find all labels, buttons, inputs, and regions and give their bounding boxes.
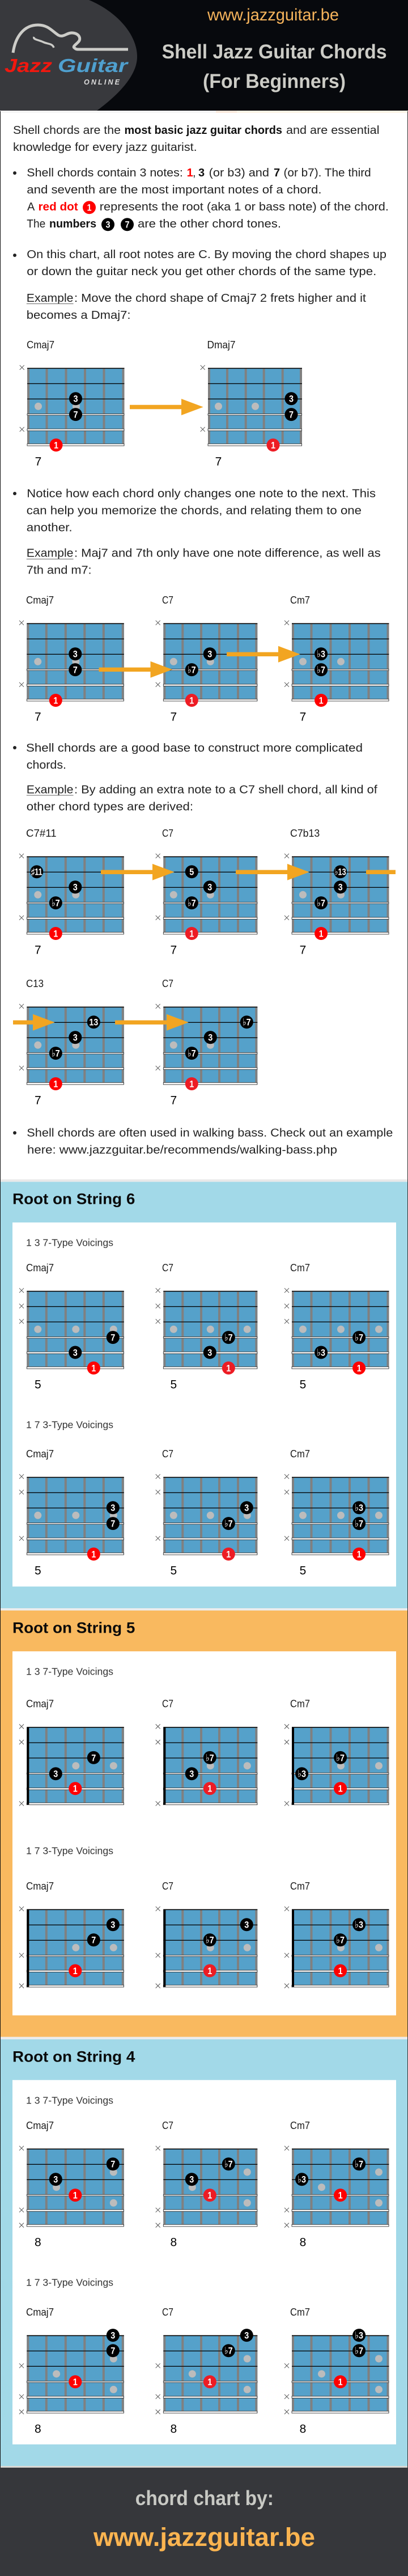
chord diagram: Cmaj7: Cmaj7	[26, 2120, 54, 2131]
panel: root on string 5	[0, 1608, 408, 2037]
bullet: walking bass: here: www.jazzguitar.be/recommends/walking-bass.php	[27, 1144, 337, 1156]
chord diagram: C7b13: 3	[338, 883, 343, 893]
title: (For Beginners)	[203, 70, 346, 92]
panel: root on string 4	[0, 2037, 408, 2466]
chord diagram: Cm7: 7	[300, 710, 306, 723]
bullet: shell chord notes: numbers	[49, 218, 96, 230]
chord diagram: Cmaj7	[20, 339, 125, 468]
chord diagram: Cmaj7: 5	[35, 1378, 41, 1391]
chord diagram: C7b13	[284, 828, 389, 956]
chord diagram: C7	[156, 1881, 257, 1988]
heading: Root on String 5	[12, 1620, 135, 1637]
arrow tail	[366, 870, 396, 874]
intro paragraph: and are essential	[286, 124, 380, 137]
bullet: shell chord notes: ,	[193, 167, 196, 179]
bullet: shell chord notes: A	[27, 201, 35, 213]
chord diagram: C7: 5	[170, 1378, 177, 1391]
intro paragraph: most basic jazz guitar chords	[125, 124, 282, 137]
bullet: shell chord notes: (or b3) and	[209, 167, 269, 179]
chord diagram: Cm7: Cm7	[290, 1881, 310, 1892]
title	[162, 41, 387, 92]
chord diagram: Dmaj7: Dmaj7	[207, 339, 236, 351]
chord diagram: C13: ♭7	[52, 1049, 60, 1059]
chord diagram: Cmaj7: 3	[110, 2331, 116, 2341]
chord diagram: Cmaj7: Cmaj7	[26, 2307, 54, 2318]
chord diagram: C7: 1	[207, 2377, 212, 2388]
bullet: root notes are C: or down the guitar neck you get other chords of the same type.	[27, 265, 376, 278]
chord diagram: C13: 3	[73, 1033, 78, 1043]
intro paragraph: Shell chords are the	[13, 124, 121, 137]
example: moving shape	[27, 292, 366, 322]
chord diagram: C7#11: 1	[53, 929, 58, 939]
subheading: 1 3 7-Type Voicings	[26, 1237, 113, 1249]
chord diagram: Cmaj7: 5	[35, 1564, 41, 1577]
chord diagram: Cmaj7: 3	[73, 394, 78, 404]
chord diagram: Cmaj7	[19, 2307, 124, 2435]
bullet: shell chord notes: represents the root (aka 1 or bass note) of the chord.	[100, 201, 389, 213]
chord diagram: Cmaj7: Cmaj7	[26, 1448, 54, 1460]
chord diagram: C7: 3	[189, 2175, 194, 2185]
chord diagram: C7#11	[19, 828, 124, 956]
subheading: 1 7 3-Type Voicings	[26, 2276, 113, 2288]
chord diagram: C7b13: ♭7	[317, 899, 325, 909]
chord diagram: Dmaj7	[201, 339, 302, 468]
chord diagram: C7#11: 7	[35, 943, 41, 956]
logo wordmark: Guitar	[58, 55, 129, 76]
chord diagram: Cmaj7: 8	[35, 2236, 41, 2249]
chord diagram: Cmaj7: Cmaj7	[27, 339, 54, 351]
bullet: root notes are C: On this chart, all root notes are C. By moving the chord shapes up	[27, 248, 386, 261]
chord diagram: C7: 1	[207, 1966, 212, 1976]
chord diagram: Cm7: ♭3	[355, 1920, 363, 1930]
chord diagram: Cm7: 1	[338, 1784, 343, 1794]
chord diagram: C7: 1	[189, 929, 194, 939]
chord diagram: C7: 8	[170, 2236, 177, 2249]
chord diagram: C13: C13	[26, 978, 44, 989]
chord diagram: Cmaj7: 3	[73, 650, 78, 660]
chord diagram: Cm7: ♭7	[317, 665, 325, 676]
chord diagram: C7: ♭7	[224, 1519, 233, 1529]
bullet: chord changes: can help you memorize the chords, and relating them to one	[27, 505, 362, 517]
chord diagram: Cmaj7: 1	[91, 1363, 96, 1374]
logo wordmark: Jazz	[5, 55, 53, 76]
chord diagram: C7	[156, 978, 257, 1107]
chord diagram: Cmaj7: 7	[91, 1753, 96, 1764]
chord diagram: C7: 3	[207, 883, 212, 893]
subheading: 1 3 7-Type Voicings	[26, 1666, 113, 1677]
intro paragraph: knowledge for every jazz guitarist.	[13, 141, 197, 154]
chord diagram: C7: 1	[189, 1079, 194, 1090]
bullet: walking bass	[13, 1127, 393, 1156]
chord diagram: Cm7: ♭7	[355, 2160, 363, 2170]
chord diagram: Cm7: Cm7	[290, 1698, 310, 1710]
heading: Root on String 4	[12, 2048, 135, 2065]
chord diagram: Cmaj7: 1	[73, 1784, 78, 1794]
chord diagram: C7: ♭7	[224, 1333, 233, 1343]
white card	[12, 2080, 396, 2444]
chord diagram: Cmaj7: Cmaj7	[26, 595, 54, 606]
subheading: 1 7 3-Type Voicings	[26, 1419, 113, 1430]
chord diagram: C7: 1	[226, 1363, 231, 1374]
chord diagram: C7b13: ♭13	[335, 867, 346, 878]
chord diagram: C7: ♭7	[206, 1753, 214, 1764]
chord diagram: C7: 3	[207, 1348, 212, 1358]
arrow	[101, 864, 175, 880]
subheading: 1 7 3-Type Voicings	[26, 1845, 113, 1856]
chord diagram: Cmaj7: 7	[110, 1519, 116, 1529]
chord diagram: Cm7: ♭3	[298, 1769, 306, 1780]
chord diagram: Cmaj7: 8	[35, 2422, 41, 2435]
footer credit: chord chart by:	[135, 2486, 274, 2510]
chord diagram: C7: 1	[189, 695, 194, 706]
chord diagram: C7: C7	[162, 1448, 173, 1460]
bullet: root notes are C	[13, 248, 386, 278]
chord diagram: Cm7	[284, 1881, 389, 1988]
chord diagram: C7: C7	[162, 828, 173, 839]
chord diagram: C7#11: 3	[73, 883, 78, 893]
chord diagram: Cm7	[284, 1698, 389, 1806]
chord diagram: C7: 3	[244, 1503, 249, 1513]
chord diagram: Cmaj7: 7	[35, 710, 41, 723]
chord diagram: C7#11: ♭7	[52, 899, 60, 909]
chord diagram: C7: ♭7	[188, 665, 196, 676]
chord diagram: Cmaj7	[19, 2120, 124, 2249]
chord diagram: Cm7: Cm7	[290, 2307, 310, 2318]
bullet: shell chord notes: Shell chords contain 3 notes:	[27, 167, 183, 179]
chord diagram: Cm7	[284, 2120, 389, 2249]
bullet: shell chord notes: red dot	[39, 201, 78, 213]
chord diagram: C7: C7	[162, 2120, 173, 2131]
chord diagram: Cmaj7: Cmaj7	[26, 1262, 54, 1274]
chord diagram: Cmaj7	[19, 1698, 124, 1806]
chord diagram: Cm7: ♭3	[355, 1503, 363, 1513]
chord diagram: Cm7: 1	[357, 1363, 362, 1374]
bullet: base for complicated chords: Example	[27, 783, 73, 796]
arrow	[130, 399, 203, 415]
footer	[0, 2466, 408, 2576]
chord diagram: Cmaj7: 7	[73, 410, 78, 420]
chord diagram: C7: ♭7	[206, 1936, 214, 1946]
chord diagram: Dmaj7: 7	[215, 455, 222, 468]
website url: www.jazzguitar.be	[207, 6, 339, 24]
chord diagram: Cm7	[284, 1448, 389, 1577]
bullet: base for complicated chords: : By adding an extra note to a C7 shell chord, all kind of	[74, 783, 377, 796]
chord diagram: Cmaj7	[19, 1448, 124, 1577]
logo badge	[0, 0, 137, 111]
chord diagram: C7	[156, 1262, 257, 1391]
chord diagram: Cm7: 1	[319, 695, 324, 706]
chord diagram: Cm7	[284, 595, 389, 723]
chord diagram: Cmaj7: Cmaj7	[26, 1881, 54, 1892]
chord diagram: Cm7: ♭3	[317, 650, 325, 660]
chord diagram: Cm7: ♭7	[336, 1936, 345, 1946]
logo wordmark	[5, 55, 129, 86]
bullet: chord changes: Example	[27, 547, 73, 560]
example: moving shape: Example	[27, 292, 73, 305]
chord diagram: C7: 7	[170, 1094, 177, 1107]
chord diagram: C13: 7	[35, 1094, 41, 1107]
chord diagram: Cm7: 1	[338, 2377, 343, 2388]
bullet: shell chord notes: The	[27, 218, 45, 230]
chord diagram: C7: 3	[189, 1769, 194, 1780]
chord diagram: Cmaj7: 7	[73, 665, 78, 676]
chord diagram: C7#11: C7#11	[26, 828, 57, 839]
chord diagram: C7b13: 7	[300, 943, 306, 956]
chord diagram: C7: 7	[170, 710, 177, 723]
chord diagram: Cm7: Cm7	[290, 1262, 310, 1274]
bullet: chord changes: Notice how each chord only changes one note to the next. This	[27, 488, 376, 500]
example: moving shape: : Move the chord shape of Cmaj7 2 frets higher and it	[74, 292, 366, 305]
chord diagram: C7	[156, 595, 257, 723]
arrow	[115, 1014, 189, 1031]
bullet: shell chord notes	[13, 167, 389, 231]
chord diagram: Dmaj7: 7	[289, 410, 294, 420]
chord diagram: Cm7: Cm7	[290, 595, 310, 606]
subheading: 1 3 7-Type Voicings	[26, 2094, 113, 2106]
chord diagram: Dmaj7: 1	[271, 440, 275, 451]
chord diagram: Cmaj7: Cmaj7	[26, 1698, 54, 1710]
chord diagram: Cmaj7	[19, 595, 124, 723]
example: moving shape: becomes a Dmaj7:	[27, 309, 130, 322]
chord diagram: C7: ♭7	[224, 2160, 233, 2170]
chord diagram: C7: 5	[189, 867, 194, 878]
bullet: shell chord notes: 1	[187, 167, 193, 179]
chord diagram: C7: 3	[244, 1920, 249, 1930]
white card	[12, 1222, 396, 1587]
chord diagram: C7: ♭7	[243, 1018, 251, 1028]
chord diagram: Cmaj7: 1	[53, 695, 58, 706]
bullet: shell chord notes: 3	[105, 220, 110, 230]
chord diagram: Cm7: Cm7	[290, 2120, 310, 2131]
chord diagram: C7b13: C7b13	[290, 828, 320, 839]
chord diagram: C7: 3	[208, 1033, 213, 1043]
chord diagram: Cmaj7: 7	[91, 1936, 96, 1946]
chord diagram: C7: ♭7	[188, 1049, 196, 1059]
bullet: chord changes: : Maj7 and 7th only have one note difference, as well as	[74, 547, 381, 560]
chord diagram: C7: 1	[207, 2191, 212, 2201]
chord diagram: C7: 8	[170, 2422, 177, 2435]
bullet: shell chord notes: and seventh are the most important notes of a chord.	[27, 184, 322, 196]
footer url: www.jazzguitar.be	[93, 2523, 315, 2552]
arrow	[99, 661, 172, 678]
bullet: shell chord notes: 7	[125, 220, 130, 230]
chord diagram: C13: 13	[89, 1018, 99, 1028]
chord diagram: C7b13: 1	[319, 929, 324, 939]
chord diagram: C7	[156, 2307, 257, 2435]
icon: guitar outline	[13, 25, 128, 53]
chord diagram: Cmaj7	[19, 1262, 124, 1391]
chord diagram: C7: ♭7	[224, 2346, 233, 2356]
logo wordmark: ONLINE	[84, 78, 120, 86]
chord diagram: C7	[156, 1448, 257, 1577]
chord diagram: Cm7	[284, 1262, 389, 1391]
bullet: walking bass: Shell chords are often used in walking bass. Check out an example	[27, 1127, 393, 1139]
chord diagram: Cmaj7: 3	[110, 1920, 116, 1930]
chord diagram: Cmaj7	[19, 1881, 124, 1988]
bullet: base for complicated chords: Shell chords are a good base to construct more complicated	[26, 742, 363, 754]
bullet: chord changes	[13, 488, 381, 577]
chord diagram: Cm7: 1	[338, 2191, 343, 2201]
chord diagram: Cm7: 8	[300, 2236, 306, 2249]
chord diagram: Cmaj7: 7	[110, 1333, 116, 1343]
panel: root on string 6	[0, 1179, 408, 1608]
bullet: chord changes: another.	[27, 522, 73, 534]
chord diagram: Cmaj7: 7	[110, 2346, 116, 2356]
chord diagram: Cm7: ♭7	[355, 2346, 363, 2356]
chord diagram: Cm7: Cm7	[290, 1448, 310, 1460]
chord diagram: Cm7: 5	[300, 1378, 306, 1391]
chord diagram: Cmaj7: 3	[110, 1503, 116, 1513]
bullet: shell chord notes: 1	[87, 203, 92, 213]
chord diagram: Cmaj7: 1	[73, 1966, 78, 1976]
chord diagram: C7	[156, 2120, 257, 2249]
chord diagram: Cmaj7: 3	[53, 2175, 58, 2185]
bullet: shell chord notes: are the other chord tones.	[138, 218, 281, 230]
chord diagram: Cmaj7: 1	[73, 2191, 78, 2201]
chord diagram: Cmaj7: 1	[73, 2377, 78, 2388]
chord diagram: C7: C7	[162, 1881, 173, 1892]
chord diagram: Cmaj7: 3	[73, 1348, 78, 1358]
chord diagram: C7: C7	[162, 2307, 173, 2318]
chord diagram: Cm7: 1	[357, 1549, 362, 1560]
chord diagram: Dmaj7: 3	[289, 394, 294, 404]
chord diagram: Cm7	[284, 2307, 389, 2435]
chord diagram: C7#11: ♯11	[31, 867, 42, 878]
chord diagram: C7: 1	[226, 1549, 231, 1560]
header	[0, 0, 408, 111]
chord diagram: Cm7: ♭3	[298, 2175, 306, 2185]
chord diagram: C7: 3	[244, 2331, 249, 2341]
bullet: shell chord notes: 3	[198, 167, 205, 179]
chord diagram: Cmaj7: 7	[110, 2160, 116, 2170]
chord diagram: Cm7: ♭3	[355, 2331, 363, 2341]
chord diagram: Cmaj7: 1	[54, 440, 58, 451]
chord diagram: C7: C7	[162, 1262, 173, 1274]
chord diagram: C7: 3	[207, 650, 212, 660]
bullet: chord changes: 7th and m7:	[27, 564, 92, 577]
bullet: base for complicated chords: other chord types are derived:	[27, 800, 193, 813]
chord diagram: Cm7: ♭7	[355, 1333, 363, 1343]
chord diagram: Cmaj7: 7	[35, 455, 41, 468]
chord diagram: C13	[19, 978, 124, 1107]
arrow	[13, 1014, 55, 1031]
chord diagram: C7	[156, 1698, 257, 1806]
chord diagram: Cmaj7: 3	[53, 1769, 58, 1780]
chord diagram: Cm7: ♭3	[317, 1348, 325, 1358]
title: Shell Jazz Guitar Chords	[162, 41, 387, 63]
chord diagram: C7: 5	[170, 1564, 177, 1577]
chord diagram: Cm7: ♭7	[336, 1753, 345, 1764]
chord diagram: C13: 1	[53, 1079, 58, 1090]
arrow	[236, 864, 309, 880]
chord diagram: C7: ♭7	[188, 899, 196, 909]
chord diagram: C7: C7	[162, 595, 173, 606]
chord diagram: Cm7: 5	[300, 1564, 306, 1577]
chord diagram: C7: 7	[170, 943, 177, 956]
chord diagram: C7: C7	[162, 978, 173, 989]
chord diagram: Cm7: ♭7	[355, 1519, 363, 1529]
intro paragraph	[13, 124, 380, 154]
chord diagram: Cm7: 1	[338, 1966, 343, 1976]
white card	[12, 1651, 396, 2016]
bullet: shell chord notes: (or b7). The third	[283, 167, 371, 179]
bullet: shell chord notes: 7	[274, 167, 280, 179]
chord diagram: C7: C7	[162, 1698, 173, 1710]
arrow	[227, 646, 300, 663]
chord diagram: Cmaj7: 1	[91, 1549, 96, 1560]
bullet: base for complicated chords: chords.	[27, 759, 66, 771]
bullet: base for complicated chords	[13, 742, 377, 813]
chord diagram: C7	[156, 828, 257, 956]
chord diagram: Cm7: 8	[300, 2422, 306, 2435]
heading: Root on String 6	[12, 1191, 135, 1208]
chord diagram: C7: 1	[207, 1784, 212, 1794]
